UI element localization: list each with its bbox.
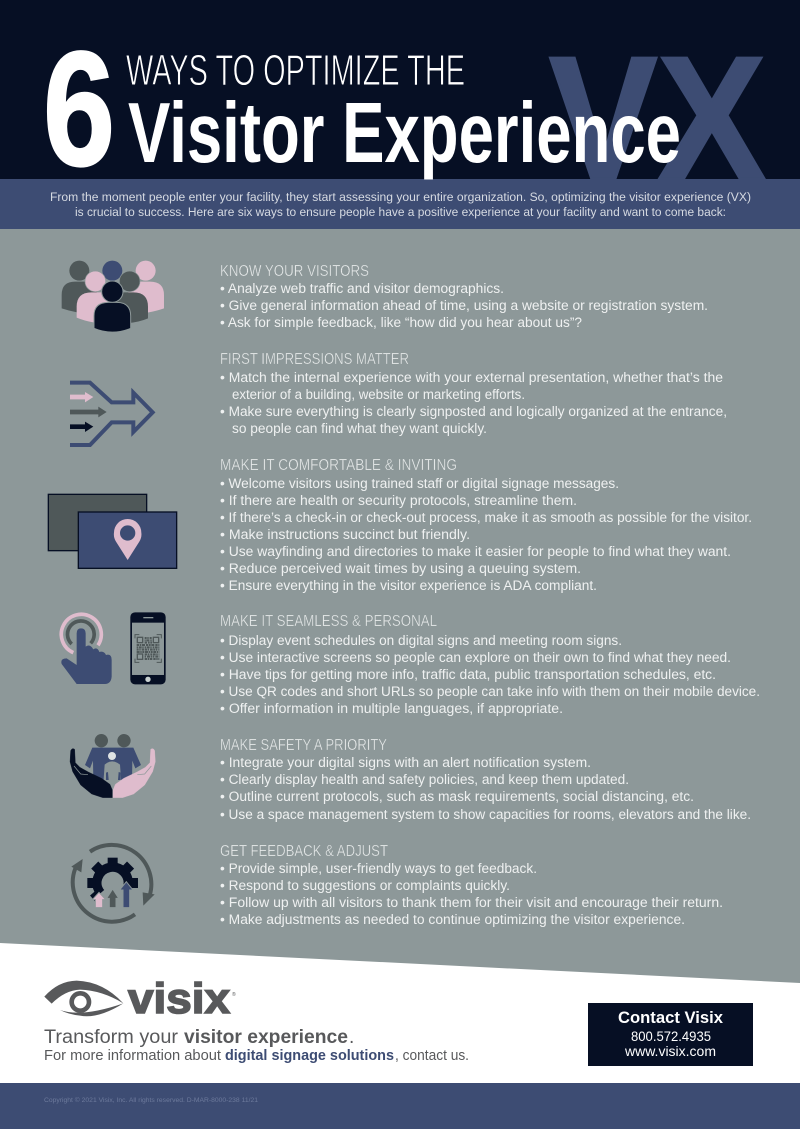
- bullet list: • If there’s a check-in or check-out process, make it as smooth as possible for the visitor.: [220, 510, 752, 525]
- intro text: From the moment people enter your facility, they start assessing your entire organization. So, optimizing the visitor experience (VX): [50, 190, 751, 204]
- bullet list: • Respond to suggestions or complaints quickly.: [220, 878, 510, 893]
- heading: MAKE IT SEAMLESS & PERSONAL: [220, 613, 437, 630]
- bullet list: exterior of a building, website or marketing efforts.: [232, 387, 525, 402]
- bullet list: • Match the internal experience with your external presentation, whether that’s the: [220, 370, 723, 385]
- bullet list: • Make sure everything is clearly signposted and logically organized at the entrance,: [220, 404, 727, 419]
- bullet list: • Provide simple, user-friendly ways to get feedback.: [220, 861, 537, 876]
- bullet list: • Have tips for getting more info, traffic data, public transportation schedules, etc.: [220, 667, 716, 682]
- contact prompt: For more information about: [44, 1047, 222, 1064]
- intro text: is crucial to success. Here are six ways to ensure people have a positive experience at your facility and want to come back:: [75, 205, 726, 219]
- heading: FIRST IMPRESSIONS MATTER: [220, 351, 409, 368]
- icon: merging arrows: [70, 383, 153, 445]
- heading: GET FEEDBACK & ADJUST: [220, 843, 388, 860]
- bullet list: so people can find what they want quickly.: [232, 421, 487, 436]
- contact box: [588, 1003, 753, 1066]
- bullet list: • Use wayfinding and directories to make it easier for people to find what they want.: [220, 544, 731, 559]
- bullet list: • Clearly display health and safety policies, and keep them updated.: [220, 772, 629, 787]
- footer white panel: [0, 943, 800, 1084]
- logo eye: [44, 981, 123, 1016]
- heading: MAKE IT COMFORTABLE & INVITING: [220, 457, 457, 474]
- title: [43, 17, 681, 200]
- icon: hands protecting family: [70, 734, 155, 798]
- icon: phone with QR code: [130, 612, 166, 684]
- bullet list: [220, 755, 751, 822]
- bullet list: • Use interactive screens so people can explore on their own to find what they need.: [220, 650, 731, 665]
- section: feedback: [220, 843, 723, 927]
- icon: digital displays with map pin: [48, 494, 177, 568]
- title line 1: WAYS TO OPTIMIZE THE: [126, 46, 465, 95]
- bullet list: • Analyze web traffic and visitor demographics.: [220, 281, 504, 296]
- bullet list: • Follow up with all visitors to thank them for their visit and encourage their return.: [220, 895, 723, 910]
- bullet list: • Ask for simple feedback, like “how did you hear about us”?: [220, 315, 582, 330]
- copyright: Copyright © 2021 Visix, Inc. All rights reserved. D-MAR-8000-238 11/21: [44, 1096, 258, 1104]
- bullet list: • Integrate your digital signs with an alert notification system.: [220, 755, 591, 770]
- icon: touch screen hand: [61, 614, 112, 684]
- bullet list: [220, 861, 723, 927]
- bullet list: • Outline current protocols, such as mask requirements, social distancing, etc.: [220, 789, 694, 804]
- section: comfortable and inviting: [220, 457, 752, 593]
- intro text: [50, 190, 751, 219]
- heading: KNOW YOUR VISITORS: [220, 263, 369, 280]
- big number 6: 6: [43, 17, 115, 200]
- bullet list: • Use QR codes and short URLs so people can take info with them on their mobile device.: [220, 684, 760, 699]
- contact box: 800.572.4935: [631, 1029, 711, 1044]
- bullet list: • Ensure everything in the visitor experience is ADA compliant.: [220, 578, 597, 593]
- contact box: www.visix.com: [624, 1044, 716, 1059]
- watermark VX: VX: [549, 21, 766, 217]
- tagline: .: [349, 1027, 354, 1048]
- bullet list: • If there are health or security protocols, streamline them.: [220, 493, 577, 508]
- icon: group of people: [62, 261, 164, 332]
- bullet list: • Offer information in multiple languages, if appropriate.: [220, 701, 563, 716]
- intro band: [0, 179, 800, 229]
- bullet list: [220, 476, 752, 593]
- contact prompt: , contact us.: [395, 1047, 469, 1064]
- bullet list: • Give general information ahead of time, using a website or registration system.: [220, 298, 708, 313]
- tagline: visitor experience: [184, 1027, 348, 1048]
- tagline: [44, 1027, 354, 1048]
- logo wordmark: visix: [128, 975, 230, 1023]
- section: know your visitors: [220, 263, 708, 330]
- bullet list: • Reduce perceived wait times by using a queuing system.: [220, 561, 581, 576]
- tagline: Transform your: [44, 1027, 179, 1048]
- bullet list: [220, 370, 727, 436]
- bullet list: • Use a space management system to show capacities for rooms, elevators and the like.: [220, 807, 751, 822]
- section: first impressions: [220, 351, 727, 436]
- bullet list: [220, 633, 760, 716]
- bullet list: • Display event schedules on digital signs and meeting room signs.: [220, 633, 622, 648]
- bullet list: • Make adjustments as needed to continue optimizing the visitor experience.: [220, 912, 685, 927]
- contact box: Contact Visix: [618, 1009, 724, 1027]
- heading: MAKE SAFETY A PRIORITY: [220, 737, 387, 754]
- bullet list: • Welcome visitors using trained staff or digital signage messages.: [220, 476, 619, 491]
- footer bar: [0, 1083, 800, 1129]
- registered mark: ®: [232, 991, 236, 998]
- section: seamless and personal: [220, 613, 760, 716]
- logo: Visix: [44, 975, 236, 1023]
- bullet list: [220, 281, 708, 330]
- bullet list: • Make instructions succinct but friendly.: [220, 527, 470, 542]
- section: safety: [220, 737, 751, 822]
- header banner: [0, 0, 800, 217]
- contact prompt: digital signage solutions: [225, 1047, 394, 1064]
- icon: gear with arrows: [71, 845, 155, 922]
- contact prompt: [44, 1047, 469, 1064]
